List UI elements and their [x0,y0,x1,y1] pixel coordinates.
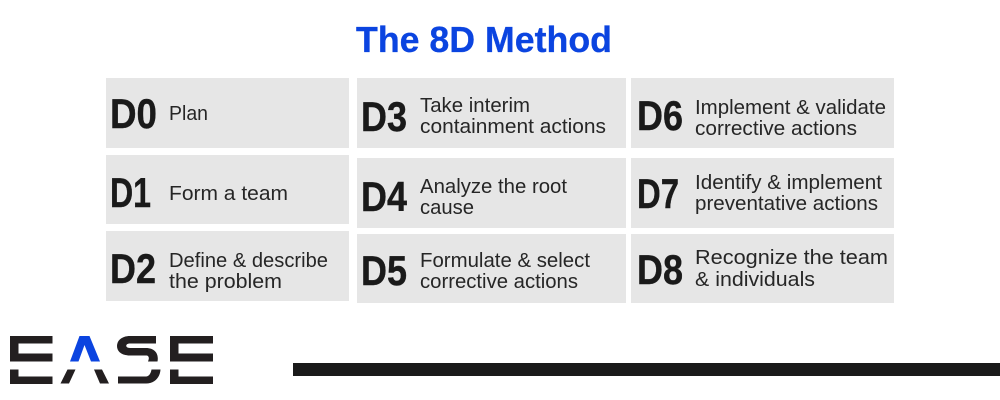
panel: D2 define and describe: the problem [169,270,282,293]
panel: D5 corrective actions: Formulate & select [420,249,590,272]
panel: D6 implement and validate: D6 [637,92,683,139]
panel: D0 plan: Plan [169,102,208,125]
panel: D7 preventative actions: D7 [637,170,679,217]
panel: D3 containment: containment actions [420,115,606,138]
panel: D2 define and describe: D2 [110,245,156,292]
panel: D4 root cause: cause [420,196,474,219]
panel: D1 form a team: Form a team [169,182,288,205]
panel: D1 form a team: D1 [110,169,151,216]
panel: D8 recognize the team: Recognize the team [695,246,888,269]
panel: D2 define and describe [106,231,349,301]
black horizontal bar [293,363,1000,376]
panel: D4 root cause: Analyze the root [420,175,567,198]
panel: D4 root cause [357,158,626,228]
logo letter S [117,336,160,384]
panel: D3 containment: D3 [361,93,407,140]
logo: EASE [10,336,213,384]
logo letter A with blue upper part [60,336,109,384]
panel: D7 preventative actions: Identify & implement [695,171,882,194]
panel: D5 corrective actions: D5 [361,247,407,294]
panel: D7 preventative actions [631,158,894,228]
panel: D8 recognize the team: D8 [637,246,683,293]
panel: D3 containment [357,78,626,148]
panel: D0 plan: D0 [110,90,157,137]
panel: D6 implement and validate: corrective actions [695,117,857,140]
panel: D1 form a team [106,155,349,224]
panel: D8 recognize the team [631,234,894,303]
panel: D7 preventative actions: preventative actions [695,192,878,215]
panel: D5 corrective actions: corrective actions [420,270,578,293]
logo letter E left [10,336,52,384]
panel: D0 plan [106,78,349,148]
panel: D6 implement and validate: Implement & validate [695,96,886,119]
logo letter E right [170,336,213,384]
panel: D2 define and describe: Define & describe [169,249,328,272]
panel: D5 corrective actions [357,234,626,303]
panel: D4 root cause: D4 [361,173,408,220]
panel: D8 recognize the team: & individuals [695,268,815,291]
panel: D3 containment: Take interim [420,94,530,117]
title: The 8D Method [356,19,612,60]
panel: D6 implement and validate [631,78,894,148]
